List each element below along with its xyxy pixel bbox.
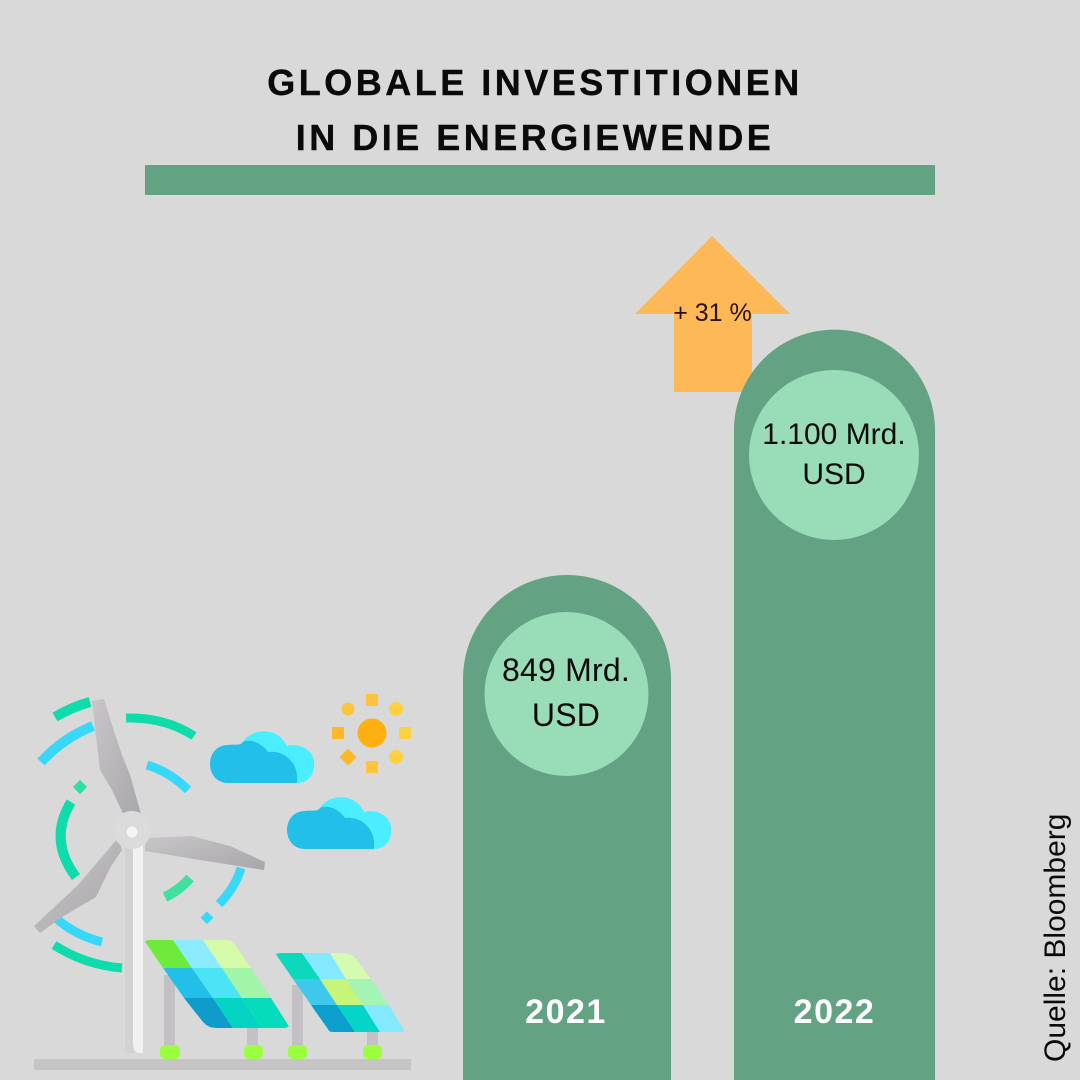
icon: panel legs [160,975,382,1059]
icon: ground [34,1059,411,1070]
bar: 2022 [734,330,935,1080]
value label: 1.100 Mrd. USD: 1.100 Mrd. [762,418,906,451]
title: GLOBALE INVESTITIONEN [267,62,803,103]
value label: 1.100 Mrd. USD: USD [802,458,866,491]
icon: solar panel right [275,953,405,1032]
icon: cloud lower [287,797,391,849]
value label: 1.100 Mrd. USD [762,418,906,491]
arrow label: + 31 %: + 31 % [673,299,752,327]
icon: cloud upper [210,731,314,783]
title [267,62,803,158]
year label: 2021: 2021 [525,993,607,1031]
value label: 849 Mrd. USD: 849 Mrd. [502,652,630,688]
icon: wind turbine [34,699,265,1053]
value circle: 2022 [749,370,919,540]
value label: 849 Mrd. USD [502,652,630,733]
title: IN DIE ENERGIEWENDE [296,117,774,158]
value label: 849 Mrd. USD: USD [532,697,600,733]
icon: sun [332,694,411,773]
value circle: 2021 [484,612,648,776]
illustration: renewable energy [34,694,411,1070]
icon: solar panel left [144,940,290,1028]
icon: wind arcs [41,702,241,968]
source note: Quelle: Bloomberg [1039,814,1072,1062]
bar: 2021 [463,575,671,1080]
year label: 2022: 2022 [794,993,875,1031]
title rule bar [145,165,935,195]
arrow: increase [635,236,790,392]
